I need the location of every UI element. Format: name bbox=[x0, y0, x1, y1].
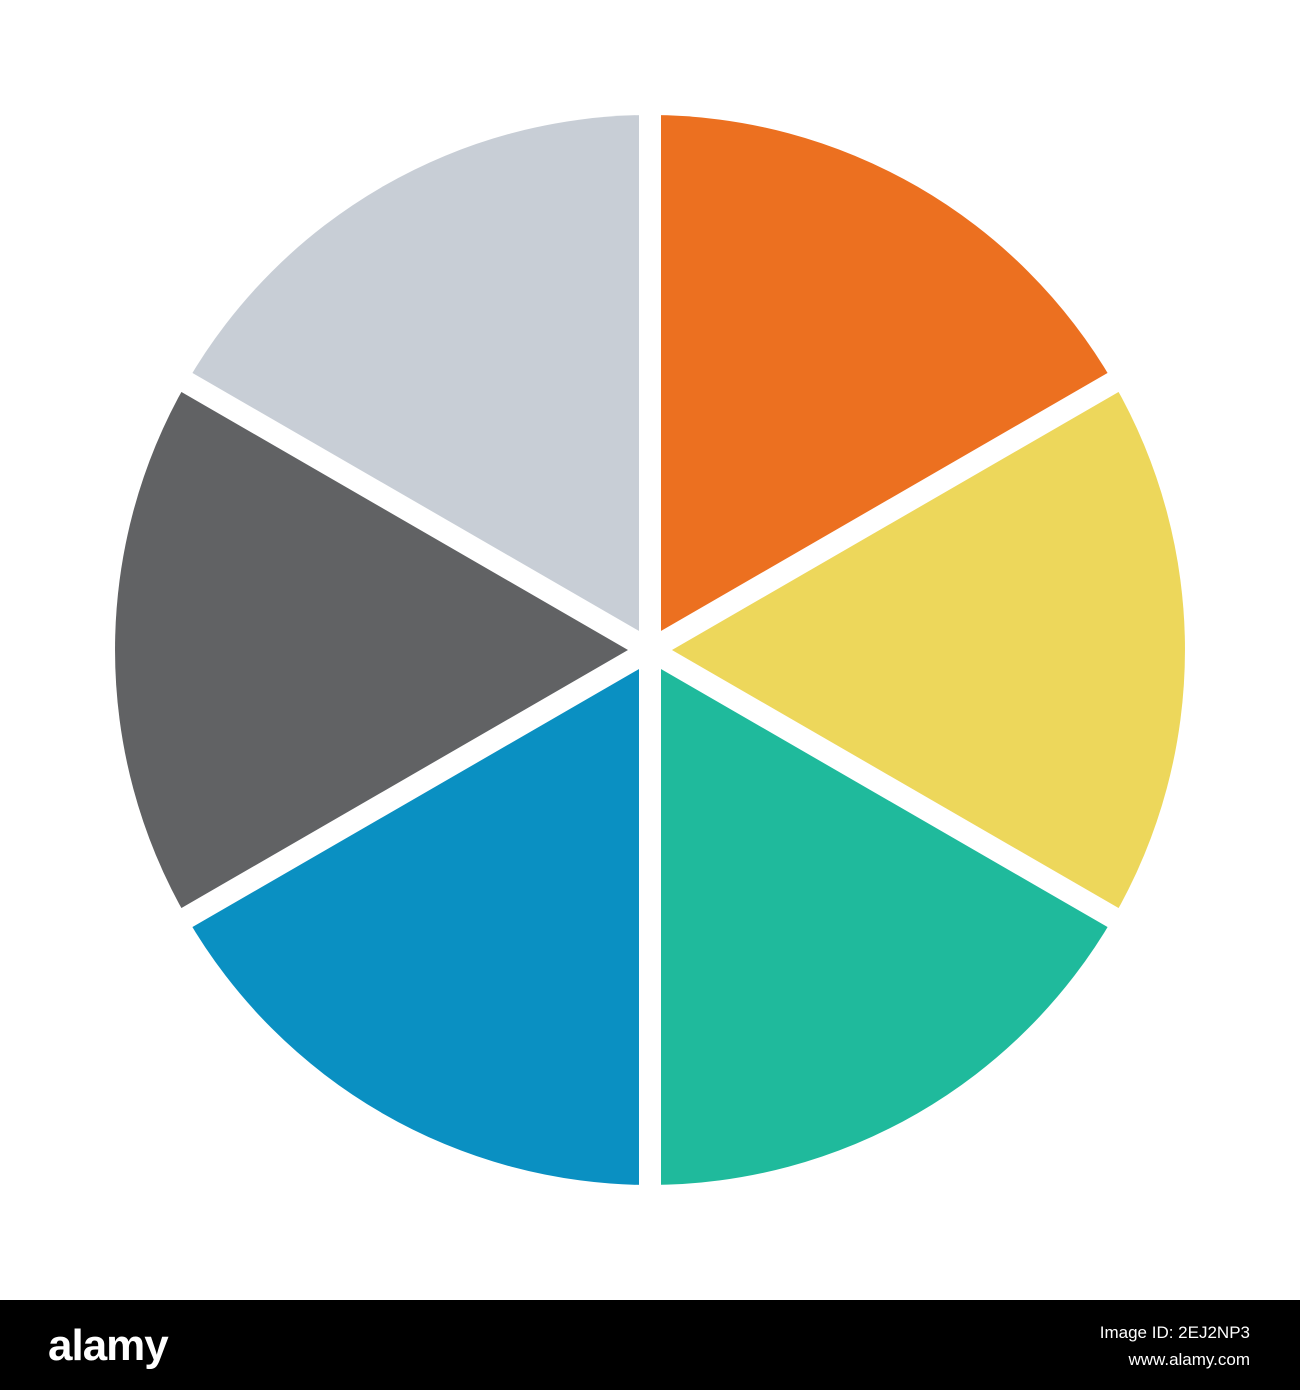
segment: blue bbox=[187, 650, 650, 1185]
segment: light gray bbox=[187, 115, 650, 650]
pie chart bbox=[115, 100, 1185, 1200]
segment: teal bbox=[650, 650, 1113, 1185]
footer url: www.alamy.com bbox=[1127, 1350, 1250, 1369]
segment: yellow bbox=[650, 382, 1185, 918]
footer bar bbox=[0, 1300, 1300, 1390]
segment: dark gray bbox=[115, 382, 650, 918]
segment: orange bbox=[650, 115, 1113, 650]
footer logo: alamy bbox=[48, 1321, 169, 1370]
footer image id: Image ID: 2EJ2NP3 bbox=[1100, 1323, 1250, 1342]
